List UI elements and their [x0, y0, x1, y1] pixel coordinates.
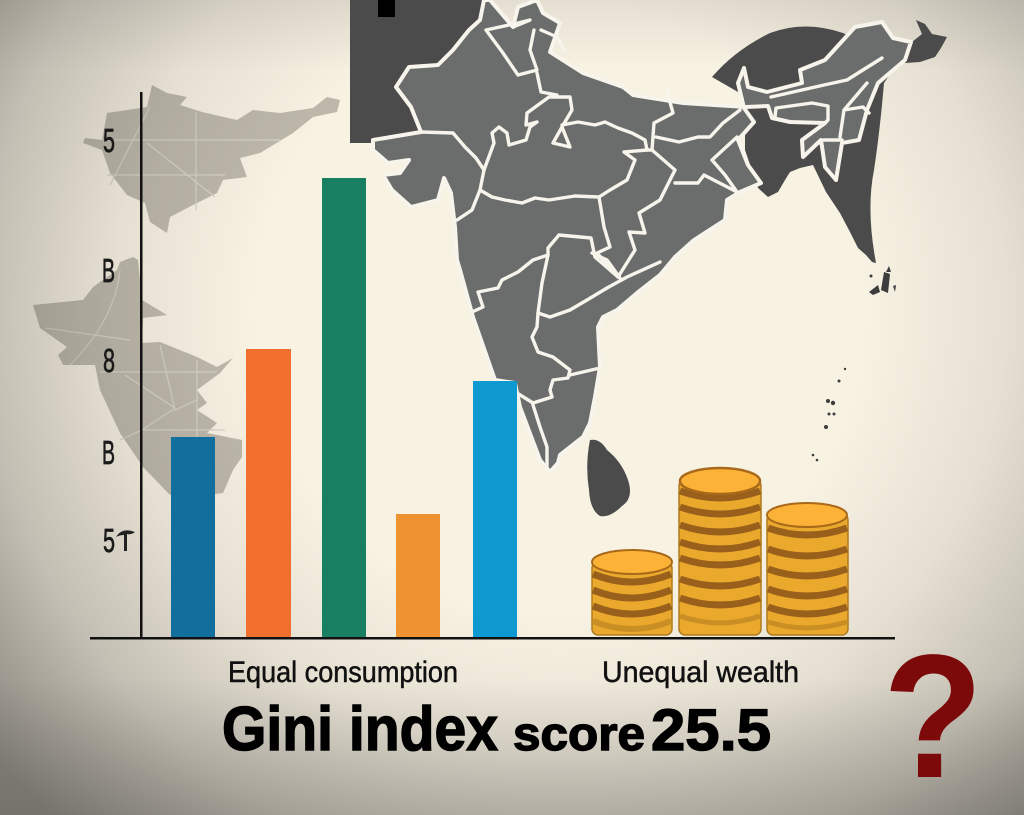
faded map: upper left [83, 85, 340, 233]
title: Gini index score 25.5: 25.5 [651, 698, 771, 763]
bar 1: blue [171, 437, 215, 638]
dark shape: far north-east tip [905, 20, 947, 63]
title: Gini index score 25.5 [222, 695, 771, 764]
state borders [421, 20, 882, 470]
India landmass [373, 0, 911, 472]
tick labels: 5 [103, 122, 115, 159]
horizontal axis [90, 637, 895, 640]
tick labels: B [102, 434, 115, 471]
coin stack: right [767, 503, 848, 635]
vertical axis [140, 92, 142, 638]
title: Gini index score 25.5: score [513, 707, 645, 760]
bottom shading [0, 680, 1024, 815]
coin stack: middle [679, 468, 761, 635]
dark shape: north-east arc, Bangladesh and Myanmar [712, 26, 900, 263]
black block at top [378, 0, 395, 17]
bar 5: light blue [473, 381, 517, 638]
tick labels: B [102, 252, 115, 289]
dark neighbouring regions [350, 0, 947, 516]
title: Gini index score 25.5: Gini index [222, 695, 498, 764]
coin stack: left [592, 550, 672, 635]
icon: red question mark: ? [883, 619, 983, 815]
faded map: lower left [33, 257, 242, 495]
India map [373, 0, 911, 472]
dark shape: Sri Lanka [587, 440, 630, 516]
bar 3: green [322, 178, 366, 638]
bar 4: amber [396, 514, 440, 638]
icon: small palm mark [116, 530, 135, 551]
coin stacks [592, 468, 848, 635]
dark block: north-west [350, 0, 490, 143]
top shading [0, 0, 1024, 70]
tick labels: 8 [103, 342, 115, 379]
islands [812, 266, 896, 461]
tick labels: 5 [103, 522, 115, 559]
label: equal consumption: Equal consumption [228, 656, 458, 689]
bar 2: orange [246, 349, 291, 638]
label: unequal wealth: Unequal wealth [602, 656, 799, 689]
bar chart [102, 92, 517, 638]
tick labels [102, 122, 115, 559]
